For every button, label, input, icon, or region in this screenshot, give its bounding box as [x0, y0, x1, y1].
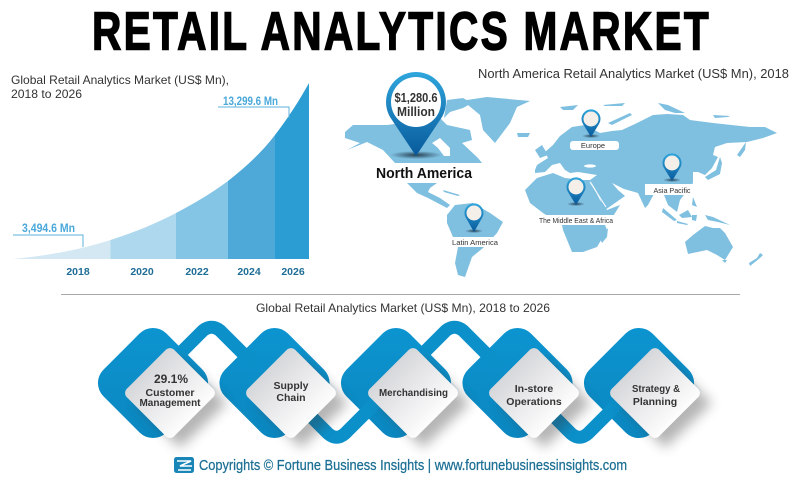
area chart: [13, 80, 309, 278]
chart heading: Global Retail Analytics Market (US$ Mn),: [11, 73, 229, 87]
label: North America: North America: [376, 165, 473, 182]
blue ribbon: [90, 320, 702, 446]
callout: 2018 value: 3,494.6 Mn: [22, 223, 75, 235]
pin: Latin America: [464, 203, 483, 233]
year axis labels: 2022: [185, 266, 209, 278]
callout: 2018 value: [13, 223, 83, 247]
pin: Asia Pacific: [662, 153, 682, 182]
map heading: North America Retail Analytics Market (US$ Mn), 2018: [478, 66, 789, 81]
pin: Europe: [582, 109, 600, 138]
footer copyright: Copyrights © Fortune Business Insights | www.fortunebusinessinsights.com: [199, 457, 627, 474]
card: Customer Management: [123, 346, 217, 440]
pin: North America: $1,280.6: [394, 90, 438, 105]
year axis labels: 2020: [130, 266, 154, 278]
card: Strategy and Planning: Strategy &: [632, 383, 680, 395]
card: Merchandising: Merchandising: [379, 387, 448, 399]
label: Europe: Europe: [581, 141, 605, 150]
callout: 2026 value: [218, 96, 289, 118]
section heading: Global Retail Analytics Market (US$ Mn), 2018 to 2026: [256, 301, 550, 315]
pin: North America: Million: [397, 104, 435, 119]
label: Europe: [570, 141, 619, 150]
card: In-store Operations: [487, 346, 581, 440]
label: Latin America: Latin America: [452, 238, 499, 247]
world map: [345, 97, 777, 277]
card: Strategy and Planning: [608, 346, 702, 440]
pin: North America: [386, 72, 446, 159]
icon: Fortune Business Insights logo: [174, 457, 194, 473]
pin: Middle East and Africa: [566, 177, 586, 206]
year axis labels: 2024: [237, 266, 261, 278]
card: Customer Management: Customer: [145, 387, 195, 399]
card: Supply Chain: Supply: [273, 380, 309, 392]
card: In-store Operations: Operations: [506, 396, 562, 408]
year axis labels: [66, 266, 305, 278]
card: Supply Chain: [244, 346, 338, 440]
card: Customer Management: Management: [140, 397, 201, 409]
chart heading: [11, 73, 229, 101]
card: Supply Chain: Chain: [276, 392, 306, 404]
callout: 2026 value: 13,299.6 Mn: [223, 96, 278, 108]
card: Strategy and Planning: Planning: [633, 396, 677, 408]
year axis labels: 2018: [66, 266, 90, 278]
ribbon of segments: [90, 320, 712, 448]
card shadows: [135, 358, 712, 448]
year axis labels: 2026: [281, 266, 305, 278]
card: Customer Management: 29.1%: [154, 372, 188, 386]
label: Middle East and Africa: The Middle East & Africa: [539, 216, 614, 225]
chart heading: 2018 to 2026: [11, 87, 82, 101]
label: Asia Pacific: [645, 184, 693, 195]
card: Merchandising: [366, 346, 460, 440]
card: In-store Operations: In-store: [515, 383, 553, 395]
label: Asia Pacific: Asia Pacific: [654, 186, 691, 195]
